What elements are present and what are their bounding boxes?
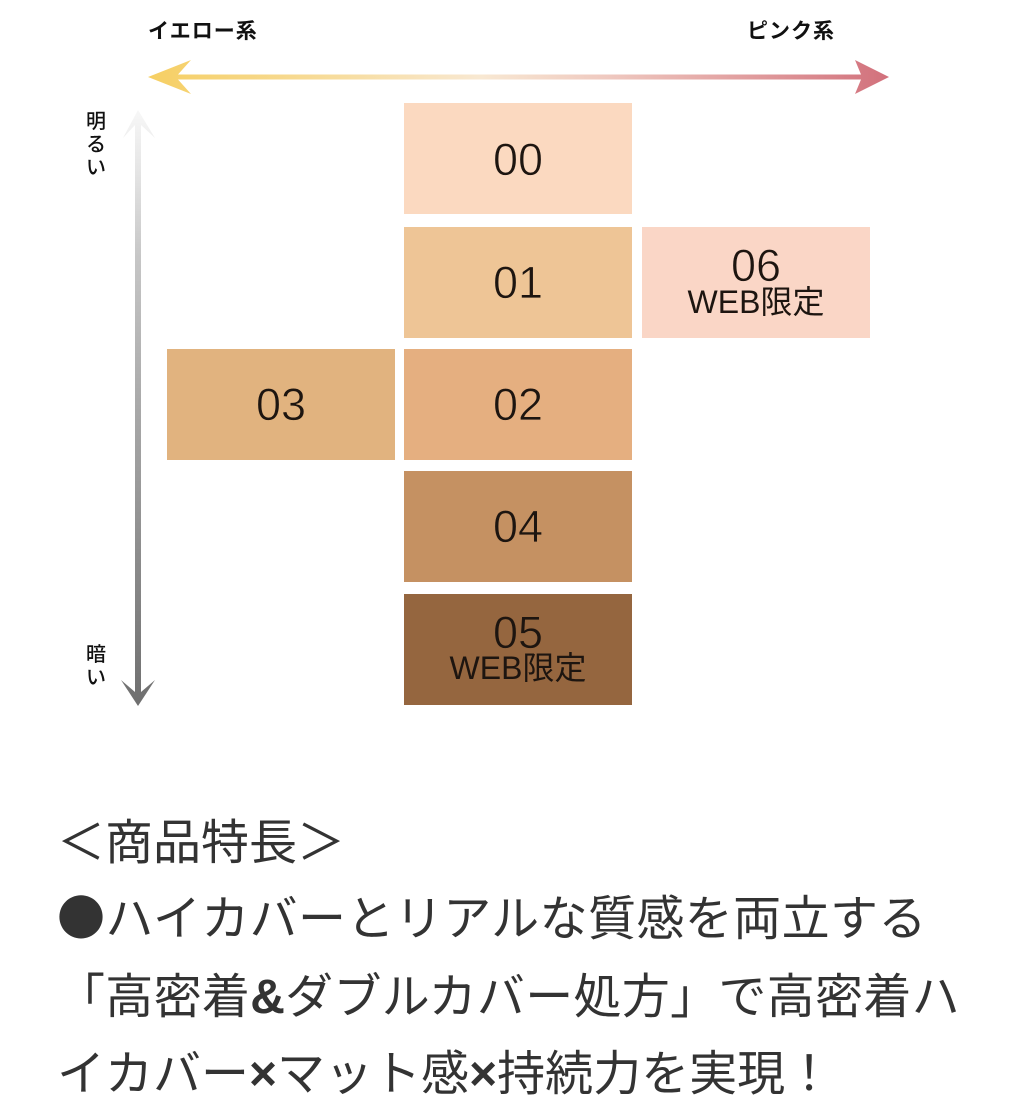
swatch 02: 02 — [493, 379, 543, 430]
swatch 06 WEB limited: 06 — [731, 240, 781, 291]
feature line 1: ●ハイカバーとリアルな質感を両立する — [57, 879, 927, 949]
swatch 05 WEB limited: 05 — [493, 607, 543, 658]
swatch 06 WEB limited: WEB限定 — [688, 284, 824, 320]
feature line 2: 「高密着&ダブルカバー処方」で高密着ハ — [57, 971, 960, 1024]
arrow: bright to dark vertical axis — [121, 112, 155, 706]
swatch 00: 00 — [493, 134, 543, 185]
arrow: yellow to pink horizontal axis — [148, 60, 889, 94]
label: dark: い — [86, 667, 106, 689]
label: pink tone: ピンク系 — [747, 20, 835, 43]
swatch 00 — [404, 103, 632, 214]
swatch 03 — [167, 349, 395, 460]
swatch 01: 01 — [493, 257, 543, 308]
label: dark: 暗 — [86, 644, 106, 666]
label: yellow tone: イエロー系 — [148, 20, 258, 43]
feature line 3: イカバー×マット感×持続力を実現！ — [57, 1048, 833, 1101]
swatch 05 WEB limited — [404, 594, 632, 705]
swatch 01 — [404, 227, 632, 338]
label: dark — [86, 644, 106, 689]
swatch 05 WEB limited: WEB限定 — [450, 650, 586, 686]
label: bright: い — [86, 157, 106, 179]
text block: product features — [57, 817, 960, 1101]
label: bright: る — [86, 134, 106, 156]
swatch 06 WEB limited — [642, 227, 870, 338]
swatch 03: 03 — [256, 379, 306, 430]
heading: ＜商品特長＞ — [57, 817, 345, 870]
swatch 04 — [404, 471, 632, 582]
swatch 04: 04 — [493, 501, 543, 552]
swatch 02 — [404, 349, 632, 460]
label: bright: 明 — [86, 111, 106, 133]
label: bright — [86, 111, 106, 179]
